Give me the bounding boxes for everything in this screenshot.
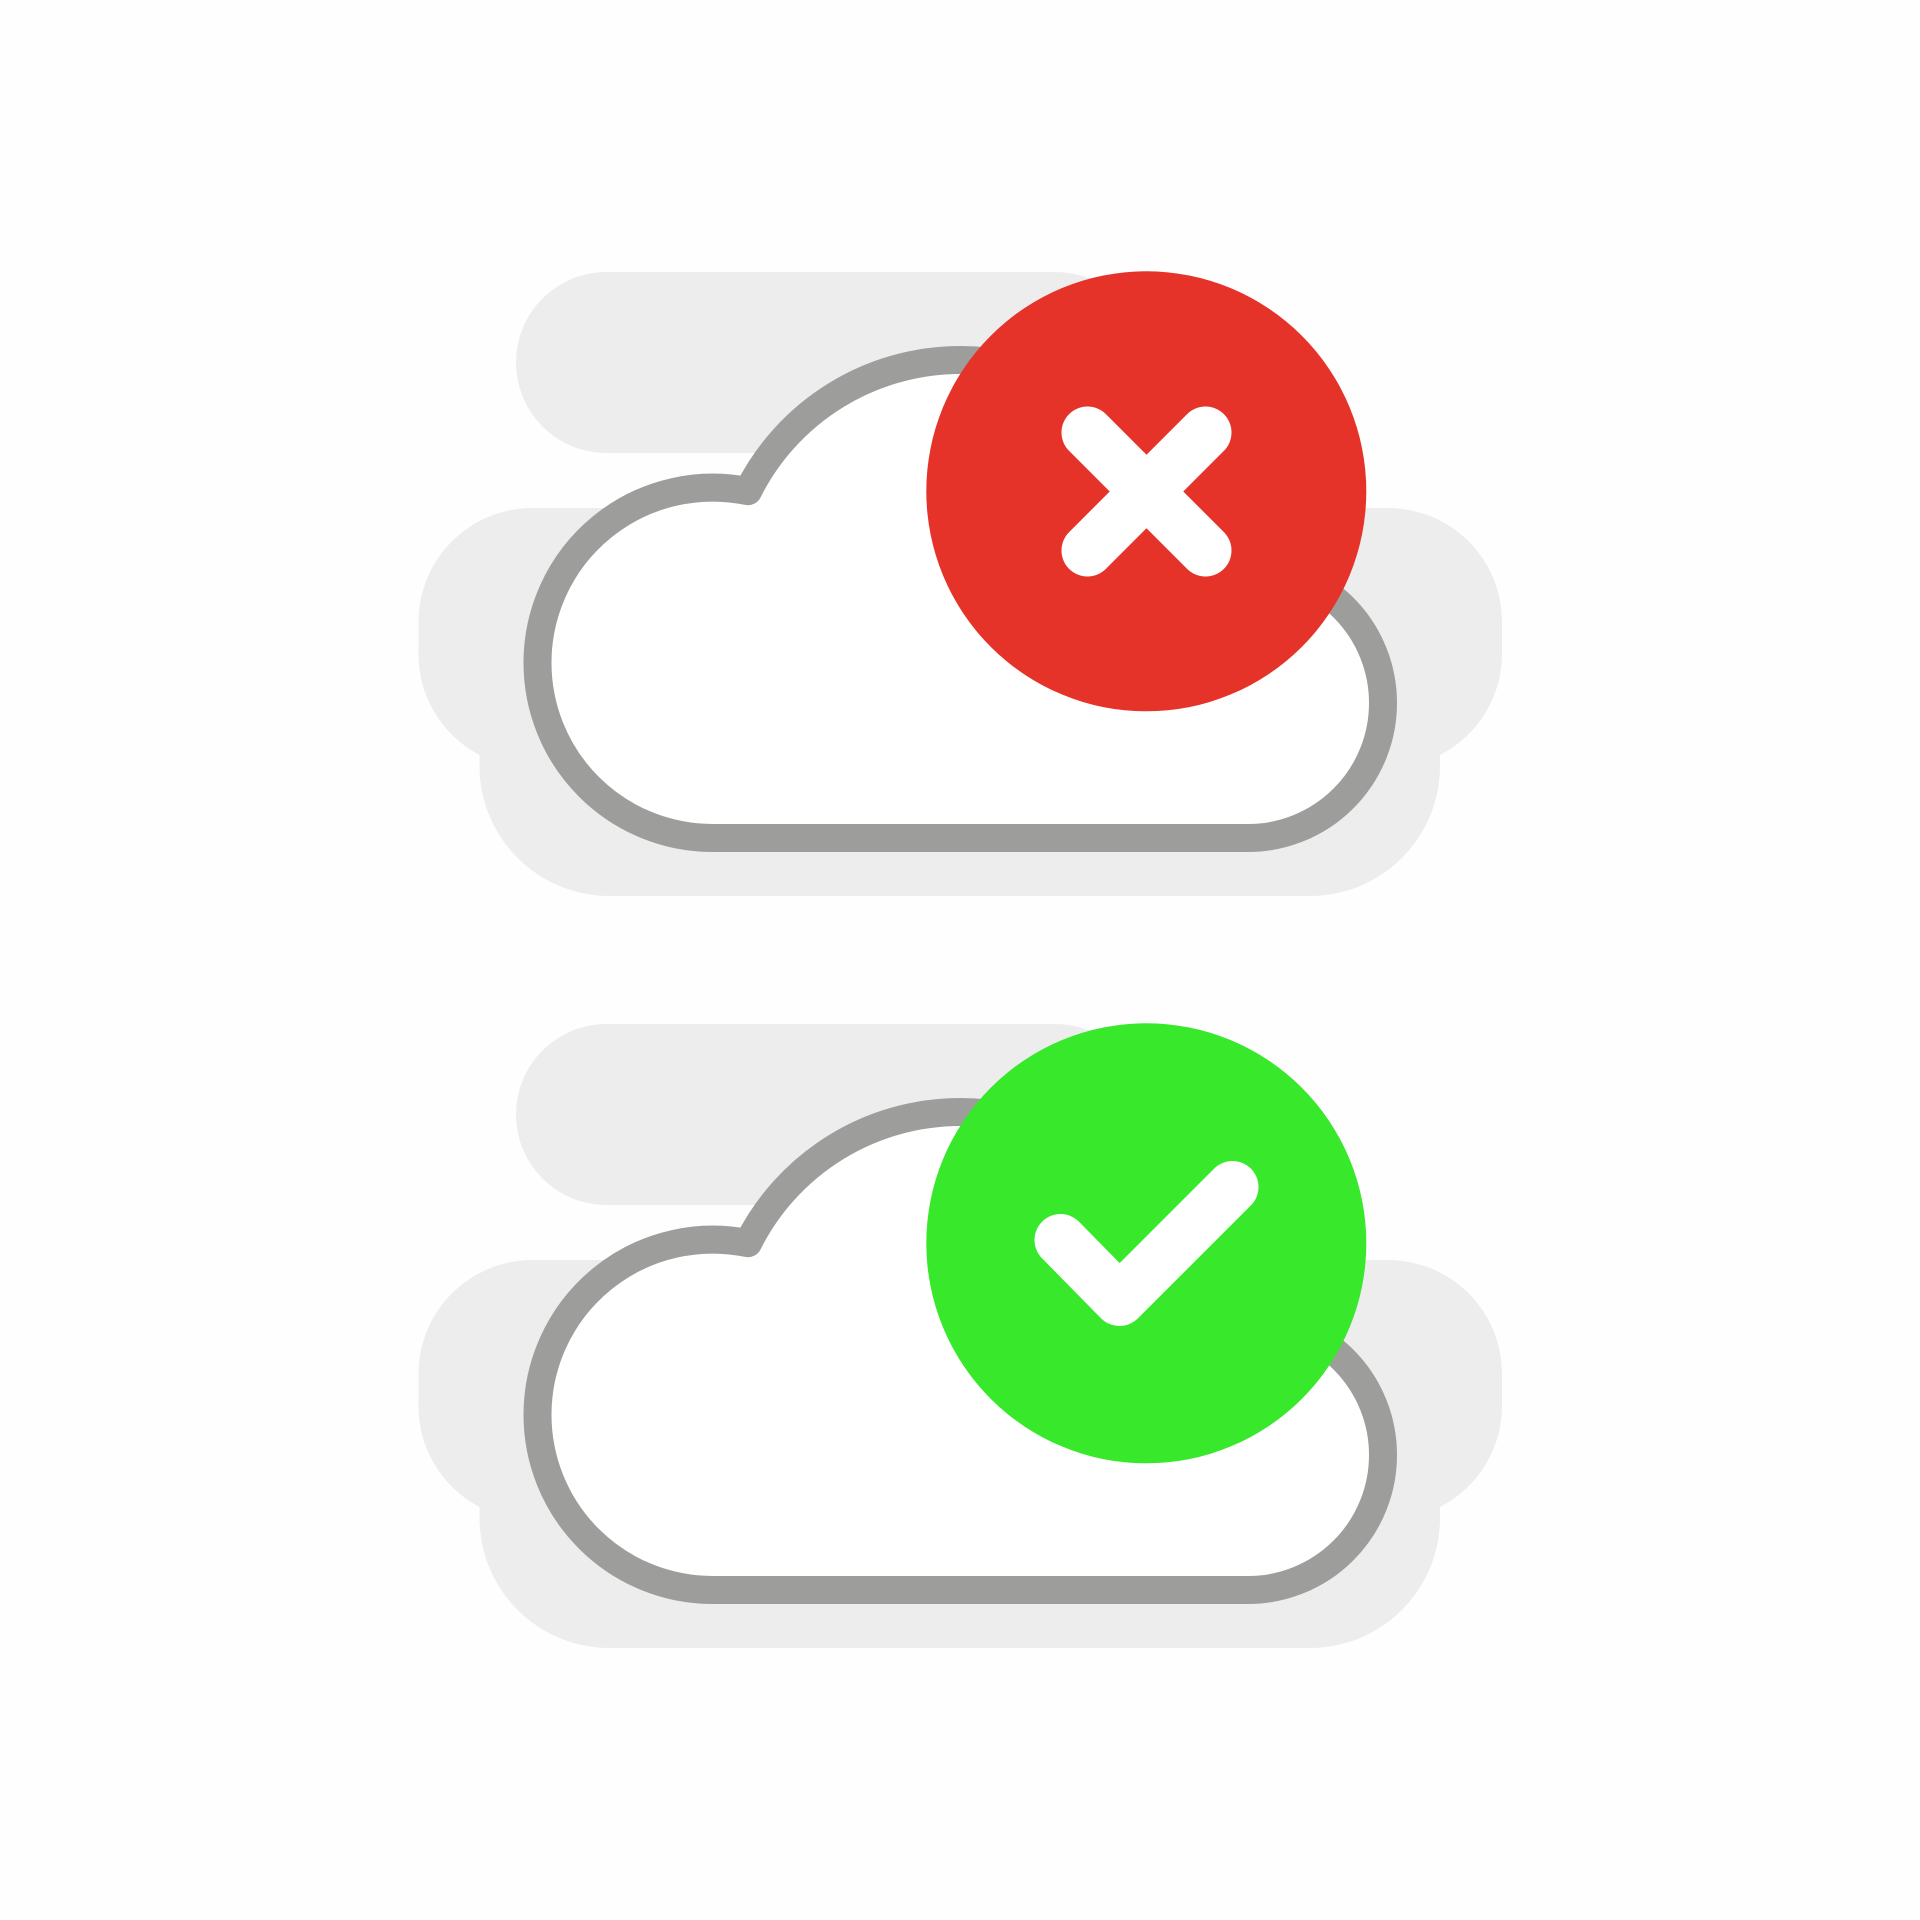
cloud outline — [538, 1112, 1383, 1590]
icon: white cross — [1088, 432, 1206, 550]
green status circle — [926, 1023, 1366, 1463]
icon: cloud with success badge — [418, 1023, 1502, 1648]
cloud background shadow shape — [418, 1024, 1502, 1648]
icon: white check mark — [1060, 1187, 1232, 1300]
cloud background shadow shape — [418, 272, 1502, 896]
icon: cloud with error badge — [418, 271, 1502, 896]
cloud outline — [538, 360, 1383, 838]
red status circle — [926, 271, 1366, 711]
